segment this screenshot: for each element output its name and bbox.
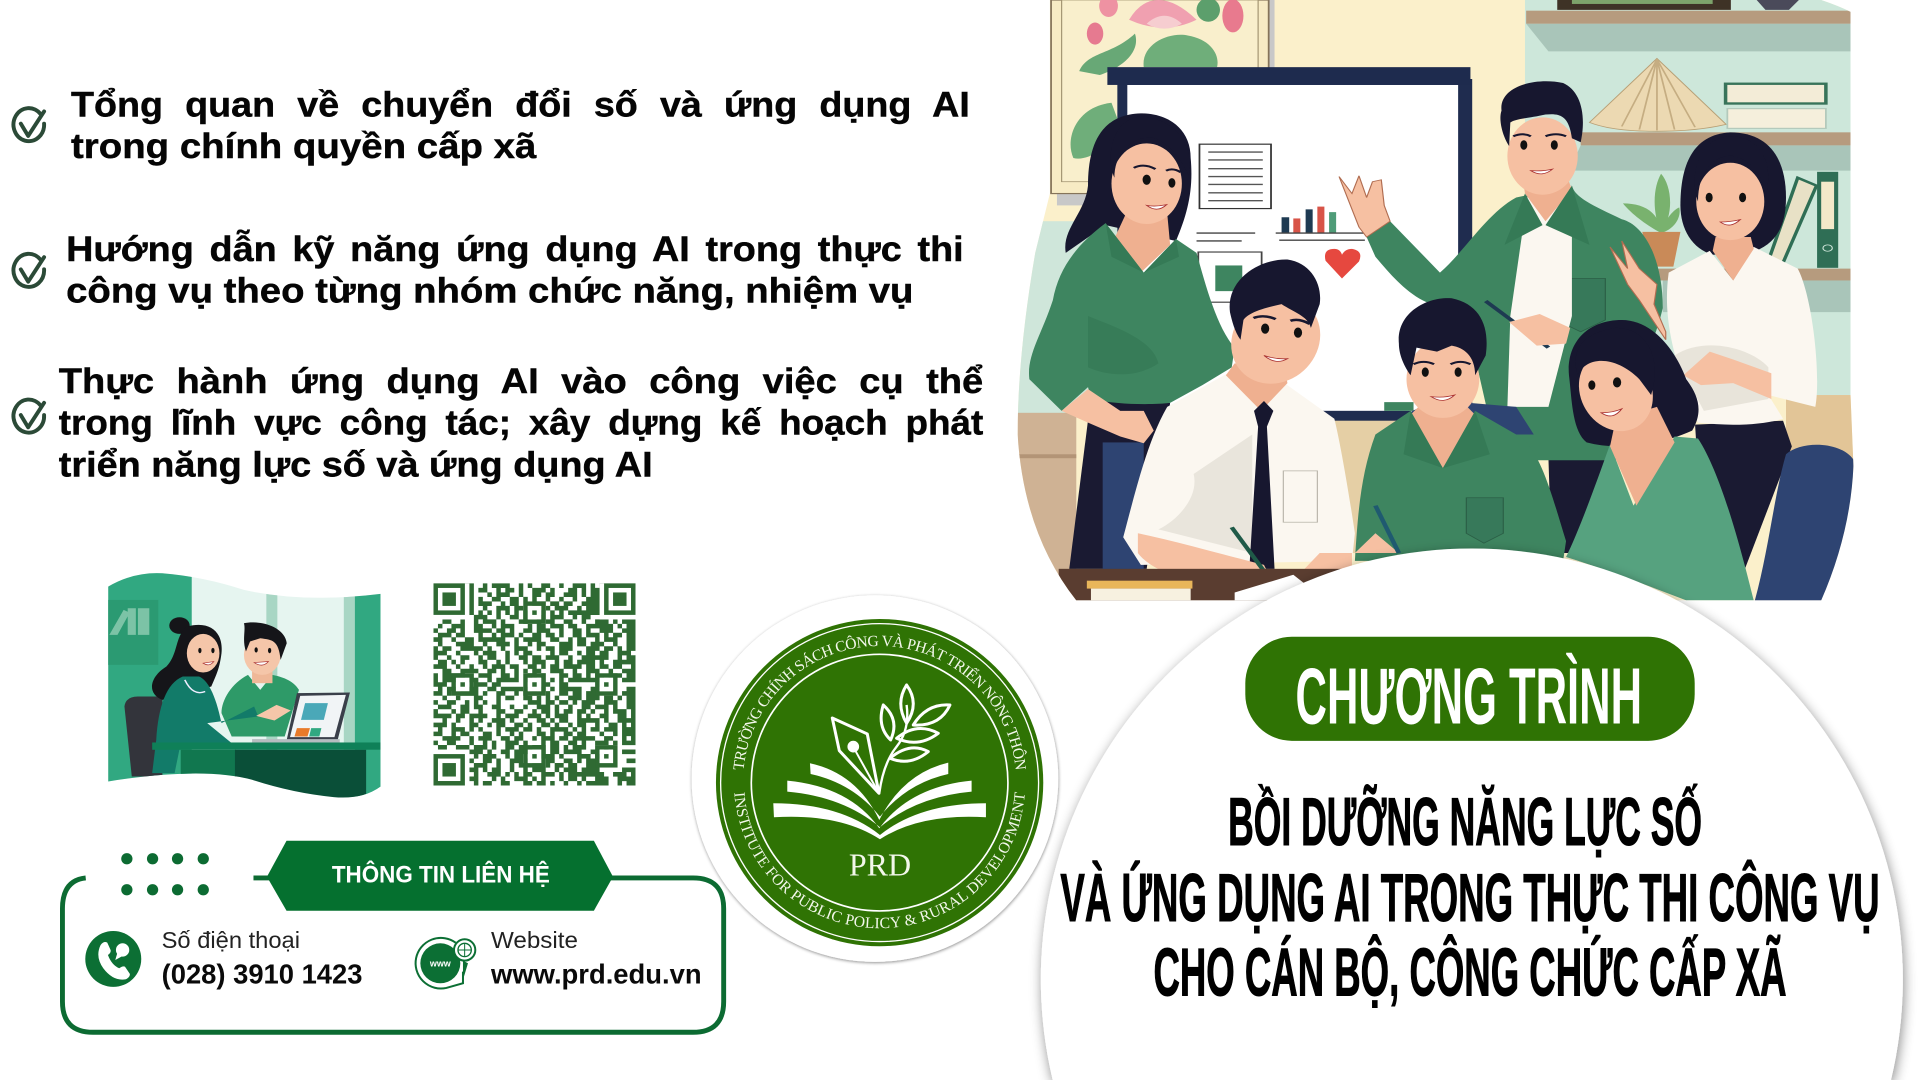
seal ring text — [733, 634, 1027, 928]
bullet 2: công vụ theo từng nhóm chức năng, nhiệm vụ — [66, 270, 913, 310]
ribbon: contact heading — [267, 841, 613, 911]
flipchart board — [1107, 67, 1472, 423]
icon: website — [416, 938, 475, 989]
person: man seated left — [1123, 260, 1399, 589]
website text: Website — [491, 927, 578, 953]
man — [221, 622, 299, 736]
phone text: Số điện thoại — [162, 927, 300, 953]
website text — [490, 927, 702, 989]
person: woman standing right — [1610, 132, 1856, 604]
icon: check 3 — [13, 400, 44, 433]
icon: website: www — [429, 959, 451, 969]
person: woman seated right — [1566, 320, 1754, 600]
programme badge: CHƯƠNG TRÌNH — [1296, 652, 1642, 741]
desk — [152, 742, 381, 800]
person: man standing presenting — [1339, 81, 1663, 553]
icon: check 2 — [13, 254, 44, 287]
person: woman standing left — [1029, 113, 1235, 573]
icon: phone — [85, 931, 141, 987]
laptop — [252, 693, 350, 742]
logo: PRD seal — [690, 594, 1061, 965]
phone text: (028) 3910 1423 — [162, 958, 362, 989]
person: man seated centre — [1355, 298, 1566, 561]
phone text — [162, 927, 362, 989]
table and book — [1058, 568, 1342, 600]
wall frame with lotus — [1051, 0, 1275, 205]
website text: www.prd.edu.vn — [490, 958, 702, 989]
seal ring text: TRƯỜNG CHÍNH SÁCH CÔNG VÀ PHÁT TRIỂN NÔNG THÔN — [733, 634, 1027, 770]
title circle — [1041, 548, 1903, 1080]
icon: check 1 — [13, 108, 44, 141]
bullet 2: Hướng dẫn kỹ năng ứng dụng AI trong thực thi — [66, 229, 964, 269]
bullet 3: triển năng lực số và ứng dụng AI — [59, 444, 653, 484]
bullet 1: trong chính quyền cấp xã — [71, 126, 537, 166]
contact panel — [62, 841, 724, 1032]
main title — [1060, 785, 1880, 1011]
seal ring text: INSTITUTE FOR PUBLIC POLICY & RURAL DEVELOPMENT — [734, 792, 1025, 928]
bullet list: programme content — [13, 84, 983, 484]
shelves and decor — [1526, 0, 1851, 312]
illustration: office team — [1000, 0, 1880, 604]
ribbon: contact heading: THÔNG TIN LIÊN HỆ — [332, 860, 550, 888]
bullet 3 — [13, 361, 983, 484]
open book — [773, 763, 986, 839]
bullet 3: trong lĩnh vực công tác; xây dựng kế hoạch phát — [59, 403, 983, 443]
logo: PRD seal: PRD — [849, 846, 911, 882]
QR code — [434, 583, 636, 786]
woman — [152, 617, 291, 773]
bullet 2 — [13, 229, 964, 310]
chair — [124, 697, 162, 776]
bullet 3: Thực hành ứng dụng AI vào công việc cụ thể — [59, 361, 983, 401]
bullet 1 — [13, 84, 970, 166]
bullet 1: Tổng quan về chuyển đổi số và ứng dụng AI — [71, 84, 970, 124]
illustration: couple at laptop — [105, 570, 383, 803]
programme badge — [1245, 637, 1695, 741]
decorative dots — [121, 853, 209, 895]
pen nib and leaves — [832, 685, 950, 793]
